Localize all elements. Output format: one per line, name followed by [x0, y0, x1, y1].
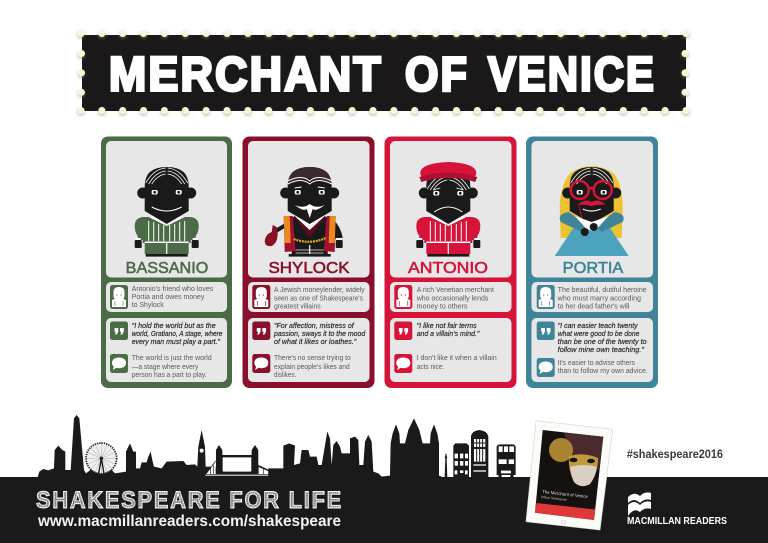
street lamp [445, 452, 447, 477]
meaning: Portia: It's easier to advise others [558, 360, 635, 367]
description: Shylock: seen as one of Shakespeare's [274, 296, 363, 302]
hashtag: #shakespeare2016 [627, 449, 723, 461]
character: Bassanio [135, 167, 199, 257]
footer band [0, 477, 768, 543]
title text: OF [405, 48, 469, 102]
quote: Antonio [417, 323, 480, 338]
meaning: Shylock [274, 355, 351, 379]
description: Portia: who must marry according [557, 296, 641, 302]
quote: Portia: "I can easier teach twenty [558, 323, 638, 330]
meaning: Antonio: I don't like it when a villain [417, 355, 497, 362]
description: Bassanio: Antonio's friend who loves [132, 286, 214, 293]
description: Antonio: A rich Venetian merchant [417, 287, 494, 294]
card: Portia [526, 136, 658, 388]
description: Portia: The beautiful, dutiful heroine [558, 287, 647, 294]
cover title: The Merchant of Venice [542, 489, 589, 499]
hat [420, 162, 476, 179]
description: Antonio [416, 287, 494, 310]
heading: Shakespeare for Life: SHAKESPEARE FOR LIFE [36, 487, 343, 514]
icon: character bust [537, 285, 555, 309]
quote: Portia: than be one of the twenty to [558, 339, 647, 346]
name: Shylock: SHYLOCK [268, 260, 350, 277]
description: Shylock: A Jewish moneylender, widely [274, 287, 365, 294]
meaning: Portia [558, 360, 648, 375]
icon: quote [537, 322, 555, 340]
meaning: Shylock: There's no sense trying to [274, 355, 351, 362]
tall building [471, 430, 488, 477]
london skyline [37, 415, 516, 478]
tablet with book cover: William Shakespeare [541, 495, 567, 502]
cap [288, 167, 332, 185]
quote: Bassanio: every man must play a part." [132, 339, 221, 346]
icon: speech bubble [394, 354, 412, 373]
name: Bassanio: BASSANIO [126, 260, 208, 277]
title banner [81, 34, 686, 111]
mask [549, 438, 573, 462]
meaning: Bassanio: —a stage where every [132, 364, 199, 371]
meaning: Shylock: explain people's likes and [274, 364, 350, 371]
macmillan readers logo [627, 492, 727, 527]
title text: VENICE [488, 48, 656, 102]
card: Antonio [384, 136, 516, 388]
meaning: Bassanio [132, 355, 212, 379]
long hair [560, 166, 623, 238]
quote: Bassanio: "I hold the world but as the [132, 323, 216, 330]
quote: Antonio: and a villain's mind." [417, 331, 480, 338]
icon: speech bubble [110, 354, 128, 373]
glasses [571, 181, 612, 199]
description: Antonio: who occasionally lends [416, 296, 489, 302]
dress [555, 226, 629, 256]
moustache and smile [578, 201, 606, 206]
meaning: Portia: than to follow my own advice. [558, 368, 648, 375]
ferris wheel [86, 443, 117, 474]
icon: quote [394, 322, 412, 340]
quote: Shylock [273, 323, 366, 346]
collar [572, 215, 612, 231]
meaning: Antonio [417, 355, 497, 371]
character: Portia [555, 166, 629, 256]
townhouse [453, 443, 469, 477]
meaning: Bassanio: person has a part to play. [132, 372, 207, 379]
quote: Shylock: of what it likes or loathes." [274, 339, 357, 346]
quote: Portia: follow mine own teaching." [558, 347, 645, 354]
description: Bassanio: to Shylock [132, 302, 164, 309]
body and robe [292, 217, 328, 254]
icon: character bust [252, 285, 270, 309]
quote: Portia [558, 323, 647, 354]
icon: character bust [394, 285, 412, 309]
description: Portia [557, 287, 647, 310]
tower bridge openings [206, 457, 276, 474]
quote: Shylock: "For affection, mistress of [274, 323, 355, 330]
title text [109, 48, 656, 102]
website url: www.macmillanreaders.com/shakespeare [37, 513, 341, 530]
name: Portia: PORTIA [563, 260, 624, 277]
character: Shylock [265, 167, 343, 257]
double decker bus [497, 444, 516, 478]
quote: Bassanio: world, Gratiano, A stage, where [132, 331, 222, 338]
description: Bassanio [132, 286, 214, 309]
quote: Bassanio [132, 323, 222, 346]
title text: MERCHANT [109, 48, 383, 102]
meaning: Shylock: dislikes. [274, 372, 296, 379]
quote: Portia: what were good to be done [558, 331, 640, 338]
icon: quote [110, 322, 128, 340]
arms and hands [560, 212, 586, 232]
icon: speech bubble [537, 358, 555, 377]
quote: Shylock: passion, sways it to the mood [273, 331, 366, 338]
description: Bassanio: Portia and owes money [132, 294, 205, 301]
description: Shylock: greatest villains [274, 303, 321, 310]
moustache and beard [295, 204, 325, 218]
arm and money bag [276, 224, 288, 231]
meaning: Antonio: acts nice. [417, 364, 444, 371]
card: Shylock [242, 136, 374, 388]
description: Antonio: money to others [417, 303, 468, 310]
description: Portia: to her dead father's will [558, 303, 630, 310]
meaning: Bassanio: The world is just the world [132, 355, 212, 362]
character: Antonio [416, 162, 480, 257]
name: Antonio: ANTONIO [408, 260, 488, 277]
icon: speech bubble [252, 354, 270, 373]
icon: character bust [110, 285, 128, 309]
icon: quote [252, 322, 270, 340]
macmillan readers logo: MACMILLAN READERS [627, 515, 727, 527]
tablet with book cover [526, 421, 613, 530]
description: Shylock [274, 287, 365, 310]
quote: Antonio: "I like not fair terms [417, 323, 477, 330]
card: Bassanio [101, 136, 232, 388]
